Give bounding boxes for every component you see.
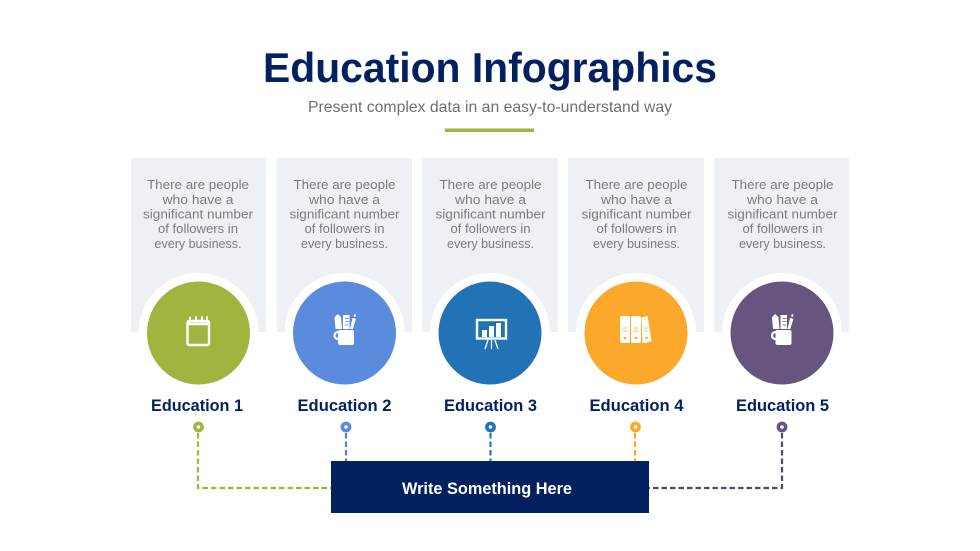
description text: significant number [436,206,546,222]
callout box: Write Something Here [402,479,572,498]
description text [728,177,838,251]
description text: of followers in [304,221,384,236]
description text: who have a [454,192,527,207]
description text: significant number [728,206,838,222]
description text: who have a [308,192,381,207]
description text: every business. [154,236,242,251]
card background [568,158,704,332]
marker [342,423,350,431]
panel: education 1 [131,158,266,431]
description text: significant number [582,206,692,222]
circle [584,282,688,384]
white ring [576,273,696,393]
card background [714,158,849,332]
description text [143,177,254,251]
circle [730,282,834,384]
label: Education 2 [298,396,392,415]
description text: There are people [586,177,688,192]
marker [195,423,202,431]
description text: every business. [301,236,388,251]
description text: of followers in [450,221,530,236]
white ring [430,273,550,393]
accent bar [445,128,534,132]
description text [290,177,400,251]
panel: education 5 [714,158,849,431]
marker [487,423,494,431]
description text: significant number [290,206,400,222]
marker [778,423,786,431]
description text [436,177,546,251]
description text [582,177,692,251]
connector lines [198,433,782,488]
label: Education 4 [590,396,684,415]
icon: binders [620,316,652,343]
callout box [331,461,649,513]
title: Education Infographics [263,44,717,91]
white ring [138,273,258,393]
icon: presentation board [477,320,506,349]
icon: pencil mug [334,314,356,345]
description text: significant number [143,206,254,222]
description text: There are people [294,177,396,192]
panel: education 2 [277,158,412,431]
label: Education 1 [151,396,243,415]
description text: of followers in [596,221,676,236]
label: Education 5 [736,396,829,415]
panel: education 4 [568,158,704,431]
circle [293,282,396,384]
description text: who have a [161,192,234,207]
description text: who have a [746,192,819,207]
white ring [722,273,842,393]
panel: education 3 [422,158,558,431]
circle [147,282,250,384]
icon: calendar [188,317,209,345]
card background [277,158,412,332]
description text: There are people [147,177,249,192]
circle [438,282,542,384]
card background [131,158,266,332]
description text: There are people [440,177,542,192]
description text: who have a [600,192,673,207]
description text: every business. [447,236,534,251]
description text: of followers in [158,221,238,236]
icon: pencil mug [772,314,794,345]
label: Education 3 [444,396,537,415]
description text: every business. [593,236,680,251]
white ring [284,273,404,393]
description text: of followers in [742,221,822,236]
card background [422,158,558,332]
description text: There are people [732,177,834,192]
marker [632,423,639,431]
description text: every business. [739,236,826,251]
subtitle: Present complex data in an easy-to-understand way [308,99,672,116]
